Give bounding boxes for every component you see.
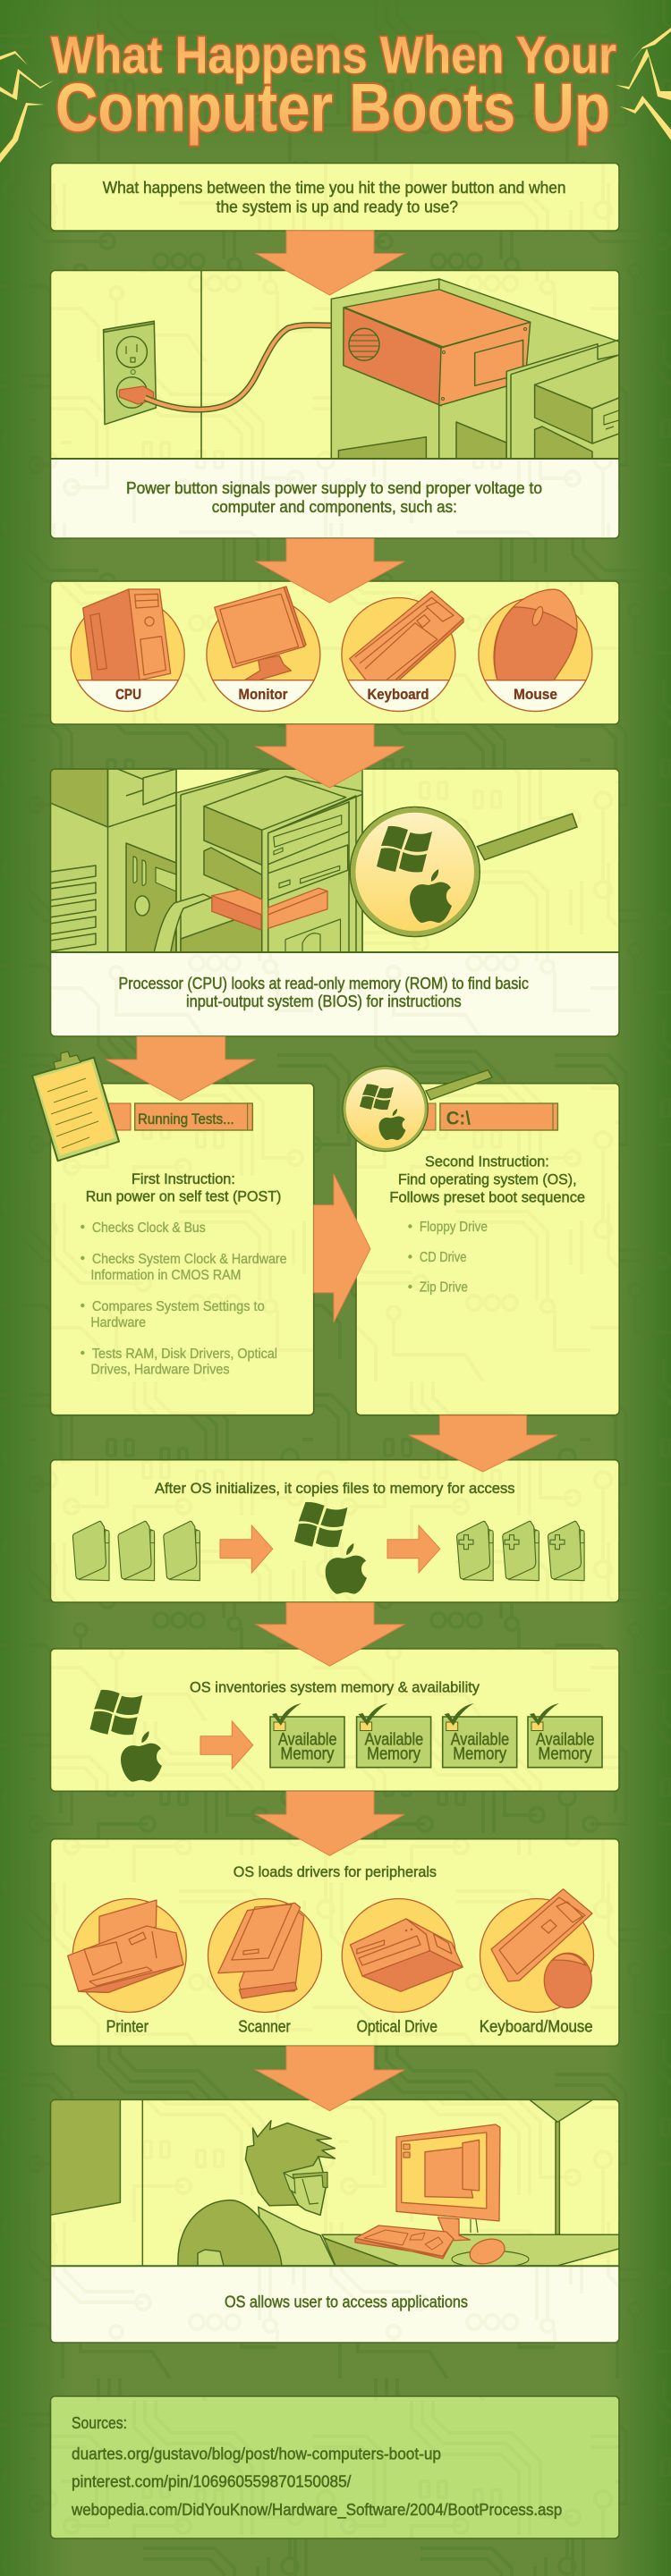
- bullet list: Checks System Clock & Hardware: [92, 1252, 287, 1267]
- heading: Run power on self test (POST): [86, 1187, 281, 1205]
- component: CPU: [71, 589, 184, 712]
- label: Printer: [106, 2017, 149, 2035]
- caption text: [118, 975, 529, 1010]
- magnifying glass: [343, 1066, 492, 1152]
- heading: Second Instruction:: [425, 1153, 549, 1170]
- person head: [245, 2121, 335, 2215]
- bullet list: Compares System Settings to: [92, 1299, 265, 1314]
- sources text: Sources:: [72, 2414, 127, 2432]
- heading: First Instruction:: [132, 1170, 235, 1187]
- heading: Follows preset boot sequence: [389, 1189, 585, 1205]
- icon: OS logos: [89, 1690, 162, 1782]
- heading: [389, 1153, 585, 1205]
- bullet list: [81, 1220, 287, 1377]
- label: Scanner: [238, 2017, 291, 2035]
- sources text: pinterest.com/pin/106960559870150085/: [72, 2473, 351, 2491]
- memory blocks: [270, 1703, 602, 1768]
- lightning bolts: [0, 28, 671, 163]
- computer monitor: [396, 2124, 500, 2241]
- bullet list: Checks Clock & Bus: [92, 1220, 206, 1236]
- caption text: OS allows user to access applications: [225, 2293, 468, 2310]
- panel: user and applications: [50, 2099, 619, 2343]
- status bar: C prompt: C:\: [446, 1109, 471, 1128]
- bullet list: Drives, Hardware Drives: [90, 1363, 230, 1377]
- arrow: processor to first instruction: [106, 1037, 256, 1101]
- arrow: second instruction to file copy: [409, 1415, 557, 1472]
- peripheral: keyboard and mouse: [480, 1889, 594, 2035]
- label: Keyboard: [367, 686, 429, 703]
- icon: OS logos: [294, 1502, 367, 1594]
- bullet list: CD Drive: [420, 1250, 467, 1265]
- icon: wall outlet: [104, 321, 156, 425]
- chair back: [178, 2200, 335, 2266]
- status bar: running tests: [89, 1103, 252, 1130]
- heading: Find operating system (OS),: [398, 1171, 576, 1187]
- arrow: memory to drivers: [256, 1792, 404, 1855]
- bullet list: Floppy Drive: [420, 1220, 488, 1235]
- panel: OS copies files: [50, 1460, 619, 1602]
- arrow: [200, 1721, 253, 1769]
- computer internals: [50, 769, 362, 952]
- bullet list: Information in CMOS RAM: [90, 1268, 241, 1283]
- computer mouse: [469, 2239, 505, 2264]
- panel: drivers for peripherals: [50, 1839, 619, 2046]
- arrow: [387, 1525, 440, 1573]
- label: CPU: [115, 686, 141, 703]
- arrow: components to processor: [256, 724, 404, 788]
- caption text: Processor (CPU) looks at read-only memory (ROM) to find basic: [118, 975, 529, 992]
- heading: OS loads drivers for peripherals: [234, 1863, 437, 1880]
- component: keyboard: [342, 591, 463, 712]
- intro text: [103, 179, 566, 216]
- panel: sources: [50, 2396, 619, 2538]
- intro text: What happens between the time you hit the power button and when: [103, 179, 566, 197]
- caption text: Power button signals power supply to send proper voltage to: [126, 479, 542, 497]
- status bar: running tests: Running Tests...: [138, 1111, 234, 1128]
- panel: power supply: [50, 270, 619, 538]
- sources text: [71, 2414, 562, 2520]
- status bar: C prompt: [412, 1103, 557, 1130]
- bullet list: Hardware: [90, 1315, 146, 1330]
- desk: [322, 2234, 619, 2268]
- bullet list: Tests RAM, Disk Drivers, Optical: [92, 1347, 277, 1362]
- icon: apple logo: [410, 869, 452, 923]
- icon: windows logo: [360, 1084, 394, 1110]
- panel: memory inventory: [50, 1649, 619, 1791]
- power plug: [120, 386, 154, 404]
- title: [51, 27, 616, 147]
- arrow: [220, 1525, 273, 1573]
- peripheral: optical drive: [342, 1899, 463, 2035]
- caption text: input-output system (BIOS) for instructions: [186, 992, 462, 1010]
- component: mouse: [479, 589, 592, 712]
- panel: processor and ROM: [50, 769, 619, 1036]
- panel: first instruction: [32, 1052, 314, 1415]
- heading: OS inventories system memory & availability: [190, 1679, 480, 1695]
- ROM chip: [212, 888, 327, 930]
- peripheral: printer: [68, 1899, 186, 2035]
- bullet list: Zip Drive: [420, 1280, 468, 1295]
- computer case with power supply: [331, 279, 619, 459]
- panel: intro question: [50, 163, 619, 231]
- keyboard: [355, 2225, 454, 2259]
- sources text: webopedia.com/DidYouKnow/Hardware_Software/2004/BootProcess.asp: [71, 2501, 562, 2520]
- heading: After OS initializes, it copies files to memory for access: [155, 1480, 515, 1497]
- component: monitor: [207, 587, 320, 712]
- panel: components: [50, 581, 619, 724]
- floor lamp: [530, 2099, 593, 2234]
- intro text: the system is up and ready to use?: [217, 198, 458, 216]
- label: Optical Drive: [357, 2017, 437, 2035]
- arrow: intro to power supply: [256, 231, 404, 295]
- icon: windows logo: [377, 826, 432, 873]
- wall and door: [50, 2099, 142, 2266]
- label: Keyboard/Mouse: [480, 2017, 593, 2035]
- caption text: computer and components, such as:: [212, 498, 457, 516]
- caption divider: [50, 458, 619, 460]
- arrow: file copy to memory: [256, 1602, 404, 1666]
- icon: source files: [72, 1521, 200, 1581]
- icon: files in memory: [457, 1521, 584, 1581]
- magnifying glass with OS logos: [350, 807, 577, 937]
- heading: [86, 1170, 281, 1205]
- sources text: duartes.org/gustavo/blog/post/how-computers-boot-up: [72, 2445, 441, 2462]
- icon: apple logo: [379, 1109, 406, 1140]
- arrow: drivers to user: [256, 2046, 404, 2111]
- label: Monitor: [238, 686, 288, 703]
- peripheral: scanner: [208, 1899, 322, 2035]
- power cord: [145, 325, 331, 410]
- arrow: first to second instruction: [314, 1174, 370, 1322]
- bullet list: [408, 1220, 488, 1295]
- label: Mouse: [514, 686, 557, 703]
- panel: second instruction: [343, 1066, 619, 1415]
- caption text: [126, 479, 542, 516]
- icon: clipboard: [32, 1052, 119, 1161]
- arrow: power supply to components: [256, 538, 404, 603]
